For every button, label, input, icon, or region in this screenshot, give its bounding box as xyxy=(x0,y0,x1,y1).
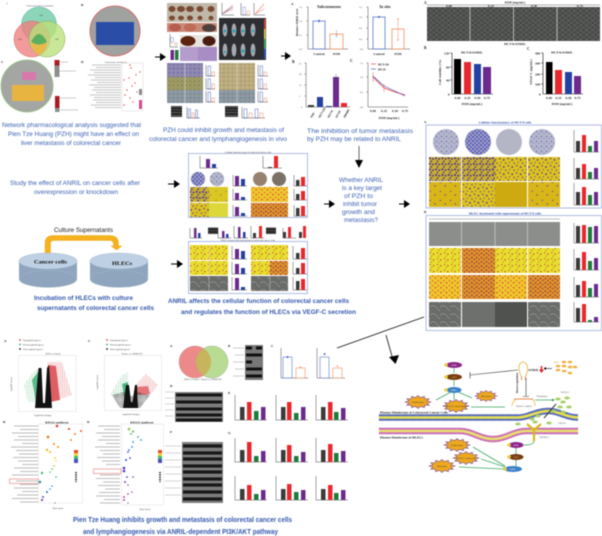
question text block xyxy=(339,177,383,224)
volcano plot: Tumor vs ANRIL: log2(fold change) xyxy=(122,413,140,416)
two-set venn xyxy=(170,344,228,381)
network graph C xyxy=(1,60,78,112)
line chart: ANRIL versus dose: 0.5 xyxy=(360,91,364,94)
KEGG plot B: Rich factor xyxy=(53,507,64,510)
arrow: coculture to HLEC panel xyxy=(171,260,183,268)
line chart: ANRIL versus dose: 0.25 xyxy=(381,109,387,113)
panel: KEGG dot plots xyxy=(3,420,164,511)
bar chart: in situ: 1.0 xyxy=(359,16,363,19)
invasion images xyxy=(429,182,560,207)
micrographs by dose: 0.25 xyxy=(488,4,494,8)
caption: main conclusion: and lymphangiogenesis via ANRIL-dependent PI3K/AKT pathway xyxy=(83,529,278,536)
translation and VEGF-C secretion: VEGF-C xyxy=(558,422,567,425)
bar chart: in situ: 0.8 xyxy=(359,27,363,30)
bar chart: cell lines: B xyxy=(292,59,295,64)
caption: incubation xyxy=(34,295,154,312)
panel: ANRIL expression in tissues xyxy=(291,2,410,120)
bar chart: cell viability: HCT-8/ANRIL xyxy=(461,50,484,54)
micrographs by dose: HCT-8/ANRIL xyxy=(504,42,527,46)
arrow: network to in vivo xyxy=(155,53,166,61)
bar charts C: C xyxy=(271,344,274,348)
translation and VEGF-C secretion: Translation xyxy=(537,395,548,398)
panel: in vivo results xyxy=(167,3,268,118)
volcano plot: PZH vs Control: Non-regulated genes xyxy=(23,348,43,351)
quantification bars xyxy=(233,175,307,216)
panel: cellular functionency of HCT-8: A xyxy=(424,120,427,124)
bar chart: cell lines: 5 xyxy=(299,95,301,98)
KEGG plot D: Rich factor xyxy=(140,508,151,511)
bar chart: VEGF-C: C xyxy=(527,47,530,51)
question text block: is a key target xyxy=(342,185,382,192)
bar chart: VEGF-C: 400 xyxy=(535,52,540,56)
bar chart: VEGF-C: 200 xyxy=(535,72,540,76)
bar chart: VEGF-C: HCT-8/ANRIL xyxy=(551,50,574,54)
bar chart: subcutaneous xyxy=(291,2,348,56)
arrow: down to question xyxy=(355,146,363,168)
bar chart: cell viability: 80 xyxy=(446,66,450,70)
ANRIL hairpin and inhibition: Down-regulation xyxy=(516,372,519,393)
bar chart: cell lines xyxy=(292,59,351,118)
venn diagram three sets: 243 xyxy=(18,38,22,41)
caption: network pharmacology: liver metastasis of colorectal cancer xyxy=(21,140,122,147)
membrane labels xyxy=(380,410,449,440)
arrow: question to cellular function xyxy=(399,200,410,208)
tumor growth charts xyxy=(222,3,265,15)
HLEC membrane xyxy=(379,431,578,439)
caption: ANRIL inhibition: The inhibition of tumor metastasis xyxy=(307,128,414,135)
bar chart: cell lines: SW480 xyxy=(342,108,351,118)
migration micrographs xyxy=(429,248,560,273)
bar chart: VEGF-C: VEGF-C (pg/mL) xyxy=(529,59,533,85)
HLEC micrographs xyxy=(190,245,288,291)
volcano plot: PZH vs Control: Downregulated genes xyxy=(23,344,44,346)
bar chart: cell viability xyxy=(424,46,493,106)
volcano plot: PZH vs Control: Upregulated genes xyxy=(23,339,41,342)
bar chart: VEGF-C: 0.50 xyxy=(566,96,572,100)
bar chart: cell lines: 25 xyxy=(299,62,302,66)
arrow: to question xyxy=(324,200,335,208)
membrane labels: Plasma Membrane of Colorectal Cancer Cells xyxy=(380,410,449,414)
upper outcome badges: Metastasis xyxy=(481,395,491,398)
VEGF-C mRNA xyxy=(512,399,535,408)
volcano plot: PZH vs Control: PZH vs Control xyxy=(45,352,61,356)
KEGG plot D: KEGG pathway xyxy=(130,420,154,424)
micrographs by dose: PZH (mg/mL) xyxy=(505,0,525,4)
bar chart: in situ: In situ xyxy=(379,4,391,9)
label: culture supernatants: Culture Supernatants xyxy=(54,227,113,234)
translation and VEGF-C secretion xyxy=(515,391,572,426)
panel: PZH dose on HCT-8/ANRIL xyxy=(424,0,600,106)
micrographs by dose: 0.00 xyxy=(446,4,452,8)
upper signaling cascade: ERK1 xyxy=(451,389,458,392)
volcano plot: PZH vs Control xyxy=(4,339,76,417)
micrographs by dose xyxy=(424,0,600,46)
ANRIL hairpin and inhibition: ANRIL xyxy=(528,368,540,372)
micrographs by dose: 0.50 xyxy=(531,4,537,8)
caption: main conclusion: Pien Tze Huang inhibits growth and metastasis of colorectal cancer cells xyxy=(73,517,292,524)
bar chart: invasion xyxy=(574,183,599,205)
bar chart: VEGF-C: 0.00 xyxy=(546,96,552,100)
bar chart: cell viability: 0 xyxy=(448,92,450,96)
tube formation micrographs xyxy=(429,302,560,327)
panel: HLEC functions xyxy=(188,239,308,294)
immunohistochemistry left xyxy=(167,63,215,103)
HLEC bars xyxy=(232,246,307,290)
upper signaling cascade xyxy=(436,362,505,407)
caption: main conclusion xyxy=(73,517,292,536)
caption: ANRIL affects: ANRIL affects the cellular function of colorectal cancer cells xyxy=(168,298,349,305)
lower signaling cascade: ERK1 xyxy=(510,468,517,471)
line chart: ANRIL versus dose: 0.00 xyxy=(370,109,376,113)
bar chart: subcutaneous: Subcutaneous xyxy=(317,4,341,9)
line chart: ANRIL versus dose: 0.0 xyxy=(360,106,364,109)
bar chart: cell viability: 120 xyxy=(444,52,449,56)
lower signaling cascade xyxy=(459,441,534,472)
caption: ANRIL inhibition xyxy=(307,128,414,143)
bar chart: VEGF-C: 0.25 xyxy=(556,96,562,100)
bar chart: VEGF-C: 0 xyxy=(539,92,541,96)
bar chart: subcutaneous: Control xyxy=(313,52,325,56)
caption: ANRIL affects: and regulates the function of HLECs via VEGF-C secretion xyxy=(181,309,356,316)
arrow: in vivo to ANRIL xyxy=(281,52,291,60)
question text block: growth and xyxy=(342,209,375,216)
bar chart: VEGF-C: PZH (mg/mL) xyxy=(552,102,572,106)
volcano plot: Tumor vs ANRIL: -log10(P value) xyxy=(96,375,99,390)
network graph B: B xyxy=(81,3,84,7)
bar chart: subcutaneous: A xyxy=(291,2,294,6)
bar charts row H xyxy=(235,476,348,500)
line chart: ANRIL versus dose: C xyxy=(350,58,353,63)
orange arrow xyxy=(45,236,122,253)
bar chart: cell viability: 40 xyxy=(446,78,450,82)
qPCR bars xyxy=(200,156,282,168)
panel: HLEC functions: HLEC treated with supernatant of colorectal cancer cells xyxy=(221,239,275,242)
micrographs by dose: A xyxy=(424,1,427,5)
bar chart: cell viability: 0.75 xyxy=(484,96,490,100)
bar chart: subcutaneous: 1.0 xyxy=(299,20,303,23)
cylinder: cancer cells: Cancer cells xyxy=(34,260,67,266)
bar chart: subcutaneous: Relative ANRIL level xyxy=(295,9,299,36)
micrographs by dose: 0.75 xyxy=(577,4,583,8)
text: study the effect: overexpression or knockdown xyxy=(34,189,118,196)
western blot B: B xyxy=(228,344,231,348)
lower outcome badges: Metastasis xyxy=(437,465,447,468)
bar charts row E: E xyxy=(228,391,231,395)
dot plot D xyxy=(81,60,143,111)
bar chart: cell viability: 0.50 xyxy=(475,96,481,100)
bar chart: cell viability: B xyxy=(424,46,427,50)
bar chart: cell lines: 20 xyxy=(299,73,302,76)
upper outcome badges: VEGF-C transcription xyxy=(445,405,467,408)
line chart: ANRIL versus dose: PZH (mg/mL) xyxy=(379,116,399,120)
bar chart: cell lines: 0 xyxy=(301,106,303,109)
question text block: inhibit tumor xyxy=(343,201,378,208)
proliferation micrographs xyxy=(429,222,560,246)
bar chart: cell viability: 0.00 xyxy=(455,96,461,100)
bar chart: cell lines: HT-29 xyxy=(334,110,342,118)
line chart: ANRIL versus dose xyxy=(350,58,408,120)
western blot D xyxy=(165,384,223,422)
KEGG plot B: B xyxy=(3,420,6,424)
bar chart: in situ: 1.2 xyxy=(359,6,363,9)
line chart: ANRIL versus dose: 1.5 xyxy=(360,62,364,65)
liver metastasis images xyxy=(170,34,217,61)
bar charts row G xyxy=(228,431,348,462)
bar chart: proliferation xyxy=(574,223,599,243)
bioluminescence imaging of mice xyxy=(219,18,266,60)
VEGFR-3 receptor xyxy=(527,424,550,441)
invasion micrographs xyxy=(429,275,560,299)
bar chart: VEGF-C: 100 xyxy=(535,82,540,86)
bar chart: cell lines: HCT-116 xyxy=(317,107,327,118)
panel: mechanism pathway xyxy=(379,361,578,472)
ANRIL hairpin and inhibition xyxy=(470,362,552,396)
volcano plot: Tumor vs ANRIL: Downregulated genes xyxy=(110,344,131,346)
venn diagram three sets xyxy=(6,2,65,57)
migration images xyxy=(429,157,560,181)
volcano plot: PZH vs Control: -log10(P value) xyxy=(10,377,13,392)
KEGG plot B: KEGG pathway xyxy=(45,420,69,424)
question text block: metastasis? xyxy=(344,217,378,224)
cancer cell membrane xyxy=(379,411,578,418)
line chart: ANRIL versus dose: 0.50 xyxy=(392,109,398,113)
volcano plot: Tumor vs ANRIL: Tumor vs ANRIL KO xyxy=(122,352,143,356)
lower outcome badges: Proliferation xyxy=(451,444,464,447)
PZH molecules xyxy=(554,361,577,374)
panel: cellular functionency of HCT-8 xyxy=(424,120,602,208)
network graph B xyxy=(81,3,140,56)
volcano plot: Tumor vs ANRIL: Upregulated genes xyxy=(110,339,128,342)
transwell images xyxy=(190,187,288,217)
caption: ANRIL affects xyxy=(168,298,356,316)
caption: network pharmacology xyxy=(2,122,141,147)
panel: ANRIL overexpression and knockdown: Cellular function assay of colorectal cancer cells xyxy=(225,151,271,154)
line chart: ANRIL versus dose: 1.0 xyxy=(360,76,364,79)
bar chart: cell viability: Cell viability (%) xyxy=(438,60,442,85)
bar chart: clones xyxy=(574,130,599,152)
bar chart: migration xyxy=(574,158,599,179)
colony dishes xyxy=(191,172,286,186)
upper signaling cascade: AKT xyxy=(452,376,457,379)
bar charts C xyxy=(271,344,345,378)
text: study the effect xyxy=(10,180,141,196)
bar chart: cell lines: HCT-8 xyxy=(326,109,334,118)
VEGF-C mRNA: VEGF-C mRNA xyxy=(516,405,532,408)
translation and VEGF-C secretion: VEGF-C xyxy=(561,391,570,394)
panel: cellular functionency of HCT-8: Cellular functionency of HCT-8 cells xyxy=(479,120,532,124)
panel: ANRIL WB and VEGF-C row xyxy=(190,226,306,238)
question text block: Whether ANRIL xyxy=(339,177,383,184)
caption: in vivo results xyxy=(149,127,287,143)
caption: network pharmacology: Network pharmacological analysis suggested that xyxy=(2,122,141,129)
bar chart: subcutaneous: 0.5 xyxy=(299,34,303,37)
bar chart: cell lines: FHC xyxy=(309,112,316,118)
panel: RNA-seq volcano plots xyxy=(4,339,162,417)
panel: HLEC treatment with supernatants: HLEC Incubated with supernatant of HCT-8 cells xyxy=(469,212,542,216)
bar chart: VEGF-C: 300 xyxy=(535,62,540,66)
KEGG plot D: D xyxy=(87,420,90,424)
PZH molecules: PZH xyxy=(554,361,559,364)
bar chart: in situ: Control xyxy=(373,52,385,56)
caption: ANRIL inhibition: by PZH may be related to ANRIL xyxy=(307,136,401,143)
bar chart: VEGF-C: 0.75 xyxy=(575,96,581,100)
panel: HLEC treatment with supernatants xyxy=(424,210,602,330)
panel: network pharmacology xyxy=(1,2,143,112)
western blots in vivo xyxy=(171,106,265,118)
western blot D: D xyxy=(170,384,173,388)
lower outcome badges xyxy=(429,438,479,472)
volcano plot: Tumor vs ANRIL: Non-regulated genes xyxy=(110,348,130,351)
volcano plot: Tumor vs ANRIL xyxy=(88,339,162,416)
VEGFR-3 receptor: VEGFR-3 xyxy=(539,436,550,439)
colony dishes xyxy=(433,129,555,155)
bar chart: in situ: 0.4 xyxy=(359,38,363,41)
two-set venn: PZH vs Control / Tumor vs ANRIL KO xyxy=(184,378,222,381)
membrane labels: Plasma Membrane of HLECs xyxy=(380,436,424,440)
panel: ANRIL overexpression and knockdown xyxy=(188,151,308,218)
line chart: ANRIL versus dose: HCT-116 xyxy=(378,64,389,66)
western blot F xyxy=(165,430,223,503)
bar charts row G: G xyxy=(228,431,231,435)
question text block: of PZH to xyxy=(344,193,373,200)
venn diagram three sets: 162 xyxy=(55,38,59,41)
caption: in vivo results: PZH could inhibit growth and metastasis of xyxy=(163,127,284,134)
venn diagram three sets: 134 xyxy=(39,14,43,17)
bar chart: cell viability: 0.25 xyxy=(465,96,471,100)
dot plot D: D xyxy=(81,60,84,64)
bar chart: cell lines: 15 xyxy=(299,84,302,87)
cylinder: HLECs: HLECs xyxy=(112,261,132,267)
caption: incubation: supernatants of colorectal cancer cells xyxy=(37,305,154,312)
upper signaling cascade: PI3K xyxy=(451,364,457,367)
western blot F: F xyxy=(170,430,172,434)
immunohistochemistry right xyxy=(219,63,268,103)
bar chart: tube formation xyxy=(574,302,599,322)
bar chart: invasion xyxy=(574,277,599,297)
bar chart: subcutaneous: 0.0 xyxy=(299,48,303,51)
KEGG plot B xyxy=(3,420,82,510)
arrow: study to overexpression panel xyxy=(168,180,180,188)
caption: network pharmacology: Pien Tze Huang (PZH) might have an effect on xyxy=(8,131,139,138)
lower signaling cascade: PI3K xyxy=(513,444,519,447)
bar charts row E xyxy=(228,391,348,420)
venn diagram three sets: Colorectal cancer metastasis xyxy=(26,4,53,8)
panel: HLEC treatment with supernatants: B xyxy=(424,210,427,214)
line chart: ANRIL versus dose: HT-29 xyxy=(378,68,386,72)
text: study the effect: Study the effect of ANRIL on cancer cells after xyxy=(10,180,141,187)
upper outcome badges: Proliferation xyxy=(412,401,425,404)
connector line and arrow to mechanism xyxy=(337,317,424,364)
volcano plot: PZH vs Control: A xyxy=(4,339,7,343)
tumor photographs xyxy=(167,3,217,32)
bar chart: VEGF-C xyxy=(527,47,583,106)
caption: in vivo results: colorectal cancer and lymphangiogenesis in vivo xyxy=(149,136,287,143)
bar chart: in situ: PZH xyxy=(395,52,402,56)
volcano plot: PZH vs Control: log2(fold change) xyxy=(34,414,52,417)
volcano plot: Tumor vs ANRIL: C xyxy=(88,339,91,343)
lower signaling cascade: AKT xyxy=(514,456,519,459)
lower outcome badges: VEGF-C expression xyxy=(456,457,477,460)
bar chart: cell viability: PZH (mg/mL) xyxy=(462,102,482,106)
venn diagram three sets: A xyxy=(6,2,8,5)
bar chart: subcutaneous: PZH xyxy=(333,52,340,56)
upper outcome badges xyxy=(405,390,497,412)
network graph C: C xyxy=(1,60,4,64)
bar chart: subcutaneous: 1.5 xyxy=(299,6,303,9)
caption: incubation: Incubation of HLECs with culture xyxy=(34,295,133,302)
KEGG plot D xyxy=(87,420,164,511)
two-set venn: A xyxy=(170,344,173,348)
panel: venn and validation xyxy=(165,344,348,503)
panel: culture supernatants diagram xyxy=(19,227,148,288)
line chart: ANRIL versus dose: 0.75 xyxy=(402,109,408,113)
western blot B xyxy=(228,344,263,380)
bar chart: in situ xyxy=(359,4,410,56)
dot plot D: Functional enrichment xyxy=(105,61,127,64)
bar chart: in situ: 0.0 xyxy=(360,48,364,51)
bar chart: migration xyxy=(574,249,599,270)
